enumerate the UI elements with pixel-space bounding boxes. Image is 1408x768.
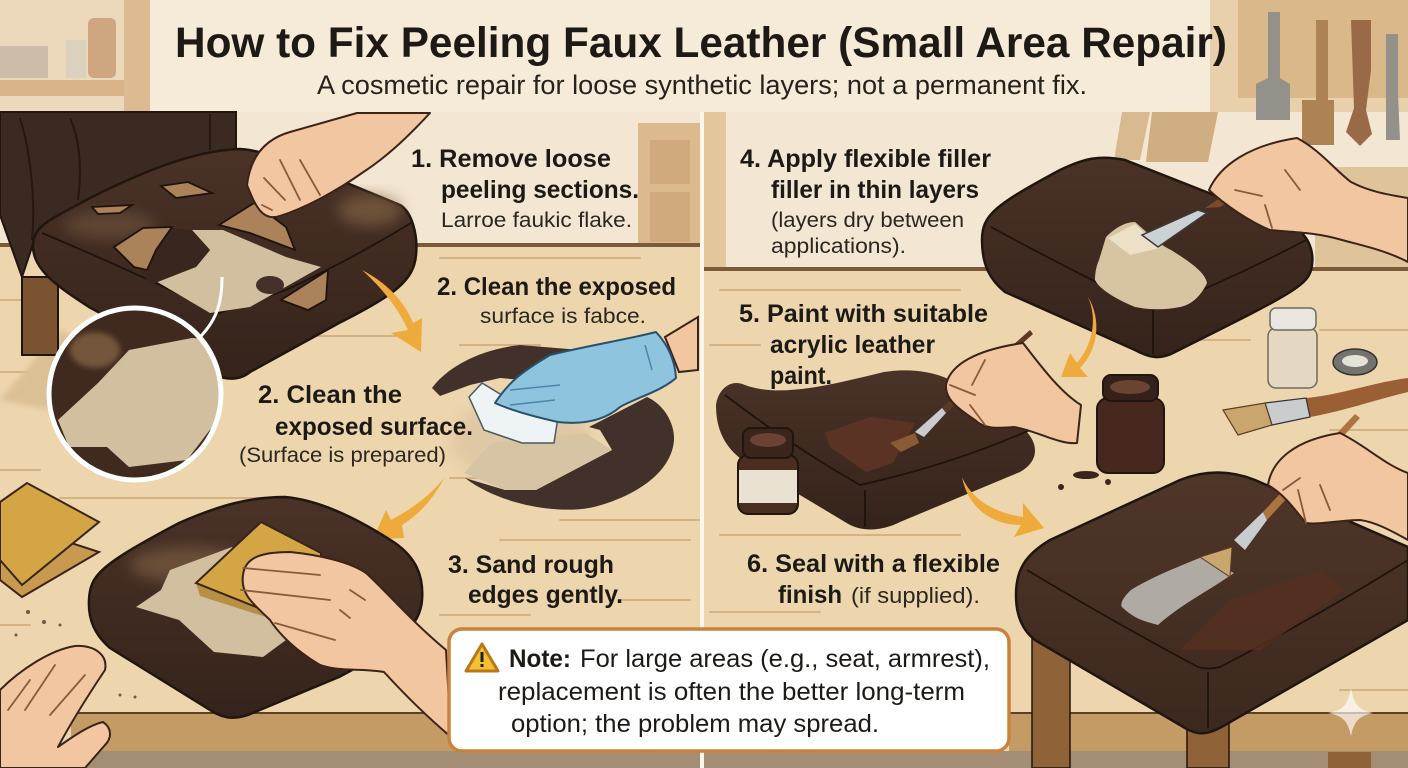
- step 4 text: filler in thin layers: [771, 176, 979, 204]
- sanding dust: [14, 610, 136, 698]
- callout: note: [449, 629, 1009, 751]
- icon: brush on table: [1223, 378, 1408, 435]
- step 2 text middle: exposed surface.: [275, 413, 473, 441]
- illustration: cleaning with cloth and blue glove: [432, 317, 698, 510]
- arrow: step 5 to 6: [962, 477, 1044, 537]
- step 6 text: 6. Seal with a flexible: [747, 550, 1000, 578]
- step 2 text middle: [239, 381, 473, 467]
- illustration: sandpaper stack: [0, 483, 99, 597]
- step 2 text top: [437, 273, 676, 328]
- step 5 text: 5. Paint with suitable: [739, 300, 988, 328]
- step 2 text middle: 2. Clean the: [258, 381, 402, 409]
- step 3 text: edges gently.: [468, 581, 623, 609]
- step 5 text: paint.: [770, 362, 832, 390]
- step 2 text top: surface is fabce.: [480, 305, 646, 328]
- title: How to Fix Peeling Faux Leather (Small Area Repair): [175, 19, 1227, 67]
- step 1 text: peeling sections.: [441, 176, 639, 204]
- illustration: finished stool with sealing brush: [1016, 414, 1408, 768]
- step 6 text: finish: [778, 581, 842, 609]
- illustration: damaged chair with hand: [0, 112, 430, 420]
- icon: sparkle watermark: [1328, 688, 1373, 736]
- icon: warning triangle: [466, 644, 498, 671]
- callout: note: replacement is often the better long-term: [498, 678, 965, 706]
- callout: note: option; the problem may spread.: [511, 710, 879, 738]
- callout: note: For large areas (e.g., seat, armrest),: [580, 645, 990, 673]
- step 4 text: (layers dry between: [771, 209, 964, 232]
- callout: note: Note:: [509, 645, 571, 673]
- illustration: seat being painted: [716, 330, 1081, 530]
- step 3 text: [448, 551, 623, 609]
- step 4 text: 4. Apply flexible filler: [740, 145, 991, 173]
- step 2 text top: 2. Clean the exposed: [437, 273, 676, 301]
- icon: brown paint jar: [1097, 375, 1164, 473]
- step 2 text middle: (Surface is prepared): [239, 444, 446, 467]
- illustration: seat with filler and hand: [982, 138, 1408, 357]
- step 1 text: 1. Remove loose: [411, 145, 611, 173]
- step 5 text: [739, 300, 988, 390]
- panel divider: [700, 112, 704, 768]
- icon: paint jar left: [738, 428, 798, 514]
- step 6 text: (if supplied).: [851, 583, 980, 608]
- step 1 text: Larroe faukic flake.: [441, 209, 632, 232]
- header band: [0, 0, 1408, 146]
- step 1 text: [411, 145, 639, 232]
- arrow: step 1 to 2: [362, 270, 422, 352]
- illustration: lower left hand: [0, 646, 110, 768]
- subtitle: A cosmetic repair for loose synthetic layers; not a permanent fix.: [317, 70, 1087, 100]
- arrow: step 4 to 5: [1061, 297, 1096, 377]
- step 4 text: [740, 145, 991, 258]
- arrow: step 2 to 3: [373, 478, 444, 539]
- illustration: sanding seat with hand: [89, 497, 451, 737]
- step 6 text: [747, 550, 1000, 609]
- icon: filler jar and lid: [1268, 308, 1377, 388]
- magnifier inset: [49, 277, 225, 480]
- paint spots: [1058, 471, 1111, 490]
- step 3 text: 3. Sand rough: [448, 551, 614, 579]
- step 5 text: acrylic leather: [770, 331, 935, 359]
- step 4 text: applications).: [771, 235, 906, 258]
